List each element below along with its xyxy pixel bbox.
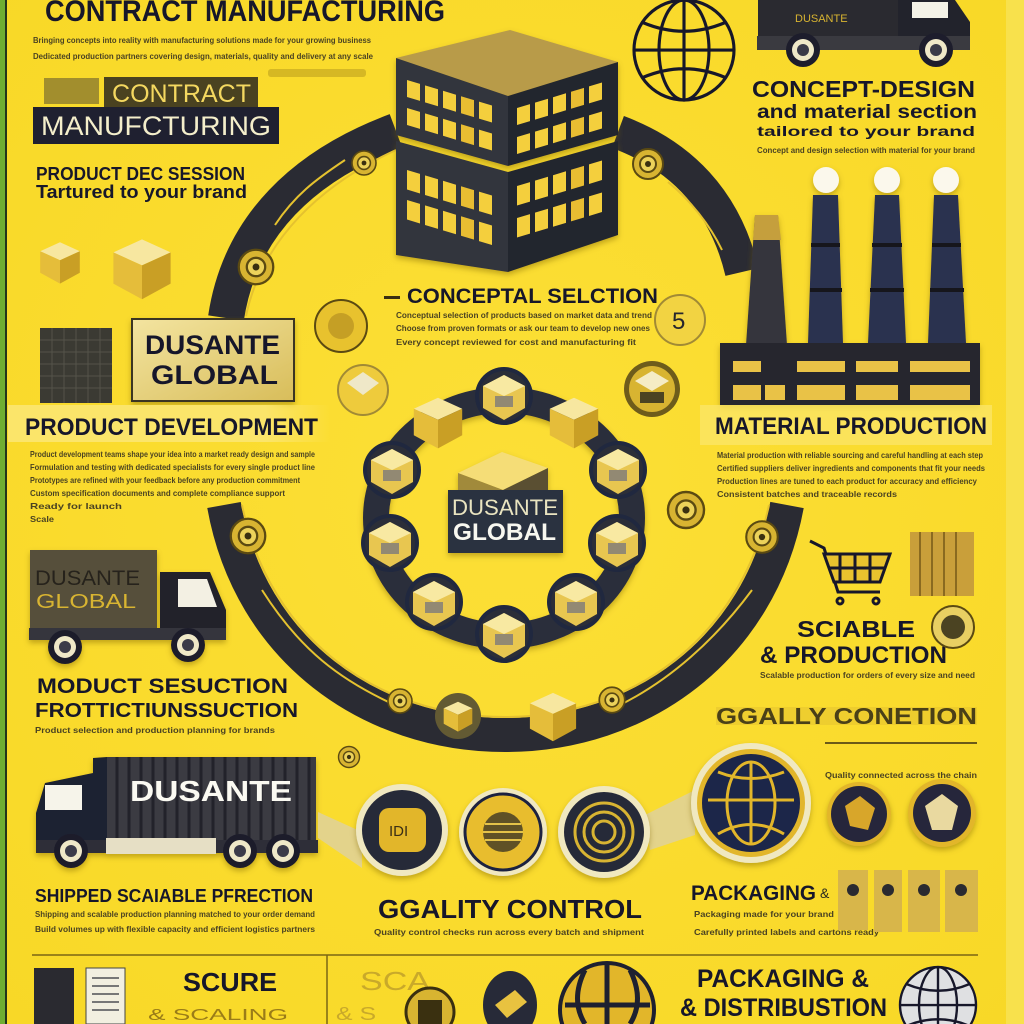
icon: large cube	[113, 239, 171, 299]
icon: gold bag	[406, 988, 454, 1024]
section: concept design: tailored to your brand	[757, 123, 975, 139]
truck mid left: DUSANTE	[35, 567, 140, 590]
section: scalable production	[760, 606, 975, 680]
section: packaging: Packaging made for your brand	[694, 909, 834, 919]
road ring bottom	[224, 505, 787, 735]
truck bottom left: DUSANTE	[130, 776, 292, 808]
section: product development: PRODUCT DEVELOPMENT	[25, 414, 318, 441]
banner: contract manufacturing: MANUFCTURING	[41, 111, 271, 141]
section: product selection	[35, 675, 298, 735]
section: concept design: CONCEPT-DESIGN	[752, 76, 975, 102]
badge: quality right	[558, 786, 650, 878]
truck mid left: GLOBAL	[36, 591, 136, 613]
truck bottom left	[36, 757, 318, 868]
faint scale label	[336, 966, 431, 1024]
section: product development	[8, 405, 330, 524]
globe bottom right	[900, 967, 976, 1024]
icon: wooden crate	[910, 532, 974, 596]
icon: shopping cart	[810, 541, 890, 604]
section: quality connection	[716, 703, 977, 780]
section: scalable operation: Shipping and scalable production planning matched to your order demand	[35, 909, 315, 919]
central logo: DUSANTE	[452, 495, 558, 520]
icon: dark binder	[34, 968, 74, 1024]
section: product development: Scale	[30, 514, 54, 524]
section: packaging and distribution	[680, 965, 887, 1022]
section: quality control: Quality control checks run across every batch and shipment	[374, 927, 644, 937]
step badges: 5	[672, 308, 685, 335]
logo plaque: DUSANTE	[145, 330, 280, 360]
truck top right: DUSANTE	[795, 13, 848, 25]
road ring top left	[226, 131, 396, 318]
section: product selection: MODUCT SESUCTION	[37, 675, 288, 698]
subtitle: Tartured to your brand	[36, 182, 247, 202]
section: product development: Product development teams shape your idea into a market ready design and sample	[30, 449, 315, 459]
section: packaging and distribution: & DISTRIBUSTION	[680, 994, 887, 1022]
section: product development: Prototypes are refined with your feedback before any production commitment	[30, 475, 300, 485]
logo plaque	[132, 319, 294, 401]
badge: small left	[827, 782, 891, 846]
section: scalable production: & PRODUCTION	[760, 642, 947, 669]
section: product development: Custom specification documents and complete compliance support	[30, 488, 285, 498]
section: material production: Material production with reliable sourcing and careful handling at each step	[717, 450, 983, 460]
packaging boxes	[838, 870, 978, 932]
badge: quality left	[356, 784, 448, 876]
intro text: Dedicated production partners covering design, materials, quality and delivery at any scale	[33, 51, 373, 61]
icon: small cube	[40, 242, 80, 284]
section: secure	[148, 967, 288, 1024]
building	[396, 30, 618, 272]
section: quality connection: GGALLY CONETION	[716, 703, 977, 729]
section: product development: Ready for launch	[30, 501, 122, 511]
section: packaging: &	[820, 885, 830, 901]
logo plaque: GLOBAL	[151, 360, 278, 390]
intro text	[33, 35, 373, 77]
section: quality connection: Quality connected across the chain	[825, 770, 977, 780]
factory	[720, 167, 980, 405]
section: conceptual selection: CONCEPTAL SELCTION	[407, 285, 658, 308]
badge: quality left: IDI	[389, 823, 408, 840]
section: material production: Consistent batches and traceable records	[717, 489, 897, 499]
section: packaging	[691, 882, 879, 937]
section: material production: Production lines are tuned to each product for accuracy and efficiency	[717, 476, 977, 486]
banner: contract manufacturing	[33, 77, 279, 144]
section: scalable operation: Build volumes up with flexible capacity and efficient logistics partners	[35, 924, 315, 934]
section: concept design: Concept and design selection with material for your brand	[757, 145, 975, 155]
badge: large globe	[691, 743, 811, 863]
globe top	[634, 0, 734, 100]
section: material production: Certified suppliers deliver ingredients and components that fit your needs	[717, 463, 985, 473]
left edge strip	[0, 0, 5, 1024]
section: conceptual selection	[384, 285, 658, 347]
icon: dark crate	[40, 328, 112, 403]
badge: half globe	[560, 963, 654, 1024]
central ring	[361, 367, 647, 663]
icon: document	[86, 968, 125, 1024]
bottom dividers	[32, 955, 978, 1024]
connector band	[318, 790, 695, 868]
node: top	[475, 367, 533, 425]
section: packaging: Carefully printed labels and cartons ready	[694, 927, 879, 937]
section: conceptual selection: Conceptual selection of products based on market data and trend	[396, 310, 652, 320]
section: material production: MATERIAL PRODUCTION	[715, 413, 987, 440]
section: scalable operation: SHIPPED SCAIABLE PFRECTION	[35, 886, 313, 906]
faint scale label: & S	[336, 1004, 376, 1024]
section: packaging and distribution: PACKAGING &	[697, 965, 869, 993]
section: material production	[700, 405, 992, 499]
section: packaging: PACKAGING	[691, 882, 816, 905]
faint scale label: SCA	[360, 966, 431, 996]
banner: contract manufacturing: CONTRACT	[112, 80, 251, 108]
section: product selection: FROTTICTIUNSSUCTION	[35, 700, 298, 722]
section: product development: Formulation and testing with dedicated specialists for every single product line	[30, 462, 315, 472]
subtitle: PRODUCT DEC SESSION	[36, 164, 245, 184]
road ring top right	[618, 132, 742, 272]
badge: small right	[908, 779, 976, 847]
badge: quality middle	[459, 788, 547, 876]
truck mid left	[29, 550, 226, 664]
section: product selection: Product selection and production planning for brands	[35, 725, 275, 735]
section: secure: SCURE	[183, 967, 277, 997]
section: quality control: GGALITY CONTROL	[378, 894, 642, 924]
intro text: Bringing concepts into reality with manufacturing solutions made for your growing business	[33, 35, 371, 45]
section: scalable production: SCIABLE	[797, 616, 915, 642]
section: conceptual selection: Choose from proven formats or ask our team to develop new ones	[396, 323, 650, 333]
section: concept design: and material section	[757, 102, 977, 123]
truck top right	[757, 0, 970, 67]
section: conceptual selection: Every concept reviewed for cost and manufacturing fit	[396, 337, 636, 347]
central logo: GLOBAL	[453, 519, 556, 546]
section: quality control	[374, 894, 644, 937]
subtitle	[36, 164, 247, 202]
badge: gold bar	[483, 971, 537, 1024]
section: scalable operation	[35, 886, 315, 934]
section: concept design	[752, 76, 977, 155]
section: secure: & SCALING	[148, 1007, 288, 1024]
central logo	[448, 452, 563, 553]
step badges	[231, 149, 778, 768]
section: scalable production: Scalable production for orders of every size and need	[760, 670, 975, 680]
